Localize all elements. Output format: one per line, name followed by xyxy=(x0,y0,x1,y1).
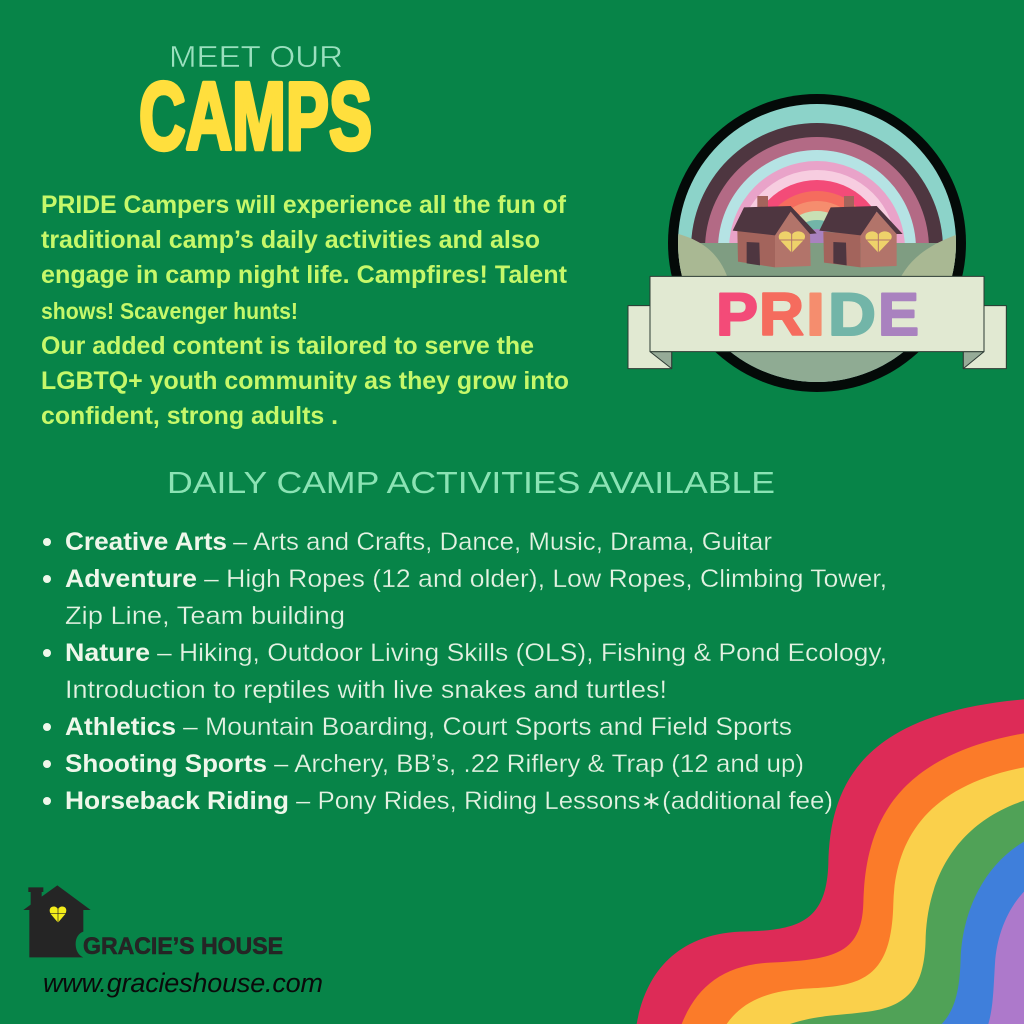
activity list: – Mountain Boarding, Court Sports and Field Sports xyxy=(183,713,792,741)
activity list: – Pony Rides, Riding Lessons∗(additional fee) xyxy=(296,787,833,815)
logo: gracie's house xyxy=(23,885,283,960)
banner with PRIDE label xyxy=(628,276,1006,369)
rainbow wave xyxy=(637,699,1024,1024)
activity list: Adventure xyxy=(65,565,197,593)
activity list: Athletics xyxy=(65,713,176,741)
title: meet our camps: CAMPS xyxy=(139,63,372,170)
website url: www.gracieshouse.com xyxy=(43,968,323,998)
intro paragraph: LGBTQ+ youth community as they grow into xyxy=(41,367,569,395)
logo: gracie's house: GRACIE’S HOUSE xyxy=(83,933,283,960)
activity list: Zip Line, Team building xyxy=(65,602,345,630)
PRIDE lettering: P xyxy=(716,281,758,348)
activity list: – High Ropes (12 and older), Low Ropes, Climbing Tower, xyxy=(204,565,887,593)
intro paragraph: shows! Scavenger hunts! xyxy=(41,298,298,324)
activity list xyxy=(43,528,887,815)
activity list: Shooting Sports xyxy=(65,750,267,778)
intro paragraph: engage in camp night life. Campfires! Talent xyxy=(41,261,568,289)
activity list: – Archery, BB’s, .22 Riflery & Trap (12 and up) xyxy=(274,750,804,778)
icon: house with heart xyxy=(23,885,91,957)
PRIDE lettering: E xyxy=(878,281,919,348)
PRIDE lettering xyxy=(716,281,919,348)
activity list: Nature xyxy=(65,639,150,667)
activity list: Introduction to reptiles with live snakes and turtles! xyxy=(65,676,667,704)
PRIDE lettering: D xyxy=(828,281,876,348)
intro paragraph xyxy=(41,191,569,430)
activity list: – Hiking, Outdoor Living Skills (OLS), Fishing & Pond Ecology, xyxy=(157,639,887,667)
intro paragraph: Our added content is tailored to serve the xyxy=(41,332,534,360)
title: meet our camps xyxy=(139,39,372,170)
houses xyxy=(733,196,903,267)
activity list: Horseback Riding xyxy=(65,787,289,815)
PRIDE lettering: R xyxy=(759,281,804,348)
activity list: – Arts and Crafts, Dance, Music, Drama, Guitar xyxy=(233,528,772,556)
pride camp badge xyxy=(628,90,1006,400)
intro paragraph: PRIDE Campers will experience all the fun of xyxy=(41,191,567,219)
PRIDE lettering: I xyxy=(806,281,825,348)
activity list: Creative Arts xyxy=(65,528,227,556)
heading: daily camp activities: DAILY CAMP ACTIVITIES AVAILABLE xyxy=(167,465,775,500)
intro paragraph: traditional camp’s daily activities and also xyxy=(41,226,540,254)
title: meet our camps: MEET OUR xyxy=(169,39,343,74)
intro paragraph: confident, strong adults . xyxy=(41,402,338,430)
